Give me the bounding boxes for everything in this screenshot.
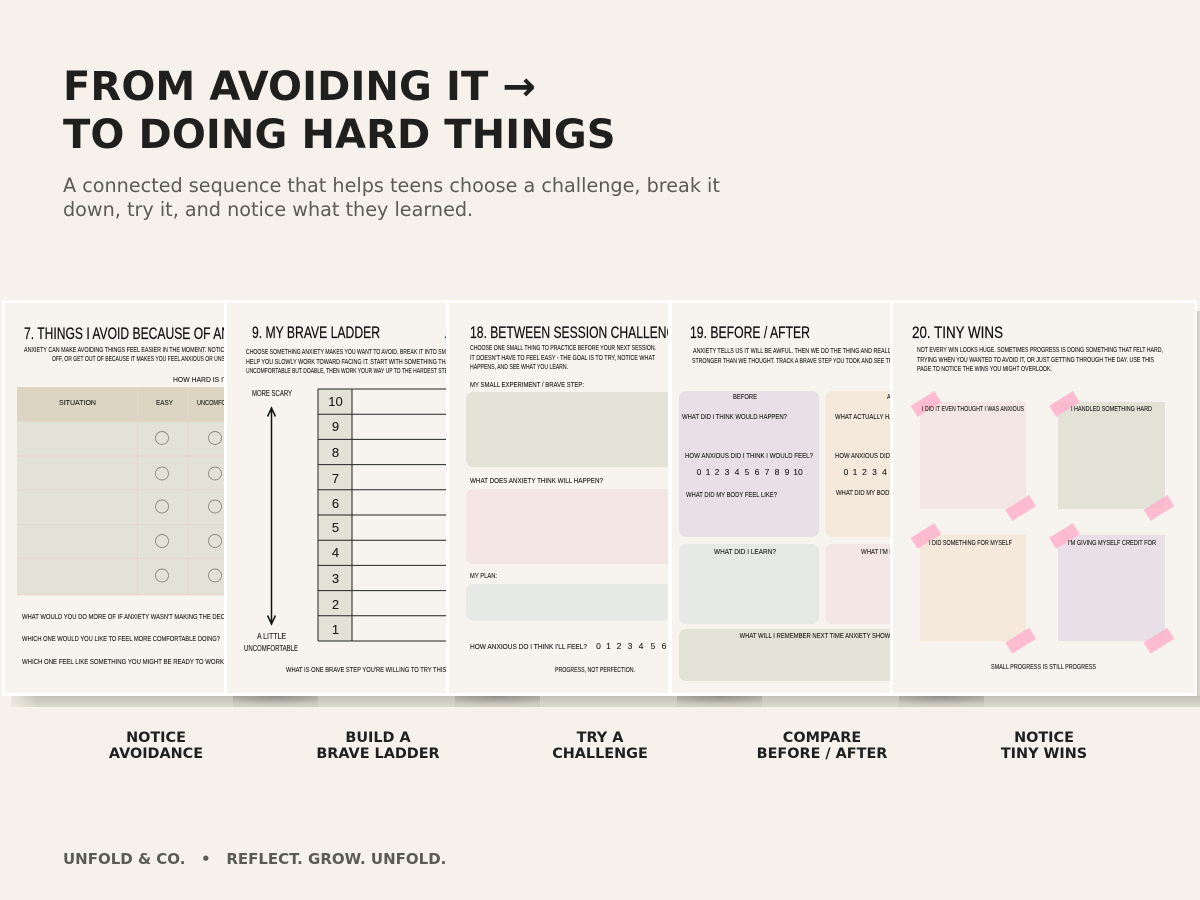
after panel: 1 [853,467,858,477]
heading: 9. MY BRAVE LADDER [252,323,380,342]
before panel: 7 [765,467,770,477]
before panel: WHAT DID MY BODY FEEL LIKE? [686,490,777,499]
sticky note: credit [1049,523,1174,654]
panel: worksheet 9 brave ladder [227,300,449,696]
heading: 20. TINY WINS [912,323,1003,342]
after panel: 4 [882,467,887,477]
learn panel: WHAT DID I LEARN? [714,547,776,556]
before panel: 0 [697,467,702,477]
anxiety rating scale: 2 [617,641,622,651]
intro text [470,343,656,371]
before panel: 6 [755,467,760,477]
title [63,64,616,158]
ladder grid: 3 [332,571,339,586]
caption: try a challenge [552,730,648,762]
panel: worksheet 19 before after [671,300,893,696]
before panel: 1 [706,467,711,477]
intro text: PAGE TO NOTICE THE WINS YOU MIGHT OVERLOOK. [917,364,1052,373]
subtitle [63,174,720,221]
anxiety rating scale: 6 [662,641,667,651]
sticky note: something hard [1049,391,1174,521]
caption: compare before after [757,730,887,762]
anxiety rating scale: 4 [639,641,644,651]
footer brand line: UNFOLD & CO. • REFLECT. GROW. UNFOLD. [63,850,446,868]
ladder grid: 2 [332,597,339,612]
before panel: 10 [793,467,803,477]
ladder grid: 10 [328,394,343,409]
label: a little uncomfortable: UNCOMFORTABLE [244,644,298,653]
ladder grid: 5 [332,520,339,535]
ladder grid [318,389,446,641]
after panel: 2 [862,467,867,477]
caption: notice tiny wins: NOTICE [1014,730,1074,746]
anxiety rating scale: 0 [596,641,601,651]
proud panel [826,544,966,624]
caption: build a brave ladder [316,730,440,762]
before panel [679,391,819,537]
before panel: 9 [785,467,790,477]
before panel: BEFORE [733,392,757,401]
arrow: scale up and down [268,408,275,624]
ladder grid: 6 [332,496,339,511]
caption: notice avoidance: AVOIDANCE [109,746,203,762]
remember panel [679,629,966,681]
panel: worksheet 20 tiny wins [893,300,1197,696]
prompt: my plan [466,571,686,620]
before panel: WHAT DID I THINK WOULD HAPPEN? [682,412,787,421]
avoidance table: EASY [156,398,173,407]
prompt: brave step: MY SMALL EXPERIMENT / BRAVE STEP: [470,380,584,389]
after panel [826,391,966,537]
anxiety rating scale: HOW ANXIOUS DO I THINK I'LL FEEL? [470,642,587,651]
before panel: 5 [745,467,750,477]
title: TO DOING HARD THINGS [63,112,616,158]
reflection questions [22,612,248,666]
anxiety rating scale [470,641,667,651]
label: a little uncomfortable: A LITTLE [257,632,286,641]
title: FROM AVOIDING IT → [63,64,536,110]
caption: notice tiny wins [1000,730,1087,762]
avoidance table: SITUATION [59,398,96,407]
sticky note: for myself [911,523,1036,654]
anxiety rating scale: 3 [628,641,633,651]
subtitle: down, try it, and notice what they learned. [63,198,473,221]
ladder grid: 1 [332,622,339,637]
ladder grid: 8 [332,445,339,460]
caption: compare before after: COMPARE [783,730,861,746]
prompt: anxiety prediction: WHAT DOES ANXIETY THINK WILL HAPPEN? [470,476,603,485]
after panel: 3 [872,467,877,477]
intro text [917,345,1163,373]
caption: build a brave ladder: BUILD A [345,730,411,746]
prompt: my plan: MY PLAN: [470,571,497,580]
anxiety rating scale: 1 [606,641,611,651]
caption: notice avoidance: NOTICE [126,730,186,746]
sticky note: credit: I'M GIVING MYSELF CREDIT FOR [1068,538,1156,547]
label: a little uncomfortable [244,632,298,653]
caption: notice avoidance [109,730,203,762]
after panel: 0 [844,467,849,477]
intro text [692,346,896,365]
footer note: SMALL PROGRESS IS STILL PROGRESS [991,662,1096,671]
prompt: brave step [466,380,686,467]
caption: notice tiny wins: TINY WINS [1001,746,1087,762]
before panel: 2 [715,467,720,477]
anxiety rating scale: 5 [651,641,656,651]
intro text [24,345,270,363]
ladder grid: 7 [332,471,339,486]
before panel: 3 [725,467,730,477]
prompt: anxiety prediction [466,476,686,564]
before panel: 8 [775,467,780,477]
before panel: HOW ANXIOUS DID I THINK I WOULD FEEL? [685,451,813,460]
sticky note: something hard: I HANDLED SOMETHING HARD [1071,404,1152,413]
footer note: PROGRESS, NOT PERFECTION. [555,665,635,674]
subtitle: A connected sequence that helps teens choose a challenge, break it [63,174,720,197]
ladder grid: 9 [332,419,339,434]
caption: try a challenge: CHALLENGE [552,746,648,762]
caption: compare before after: BEFORE / AFTER [757,746,887,762]
sticky note: anxious [911,391,1036,521]
ladder grid: 4 [332,545,339,560]
sticky note: anxious: I DID IT EVEN THOUGHT I WAS ANXIOUS [922,404,1024,413]
caption: try a challenge: TRY A [577,730,623,746]
intro text: HAPPENS, AND SEE WHAT YOU LEARN. [470,362,568,371]
before panel: 4 [735,467,740,477]
heading: 19. BEFORE / AFTER [690,323,810,342]
caption: build a brave ladder: BRAVE LADDER [316,746,440,762]
avoidance table [17,387,247,595]
panel: worksheet 18 between session challenge [449,300,671,696]
intro text [246,347,455,375]
label: more scary: MORE SCARY [252,389,292,398]
panel: worksheet 7 things I avoid [2,300,227,696]
sticky note: for myself: I DID SOMETHING FOR MYSELF [929,538,1012,547]
shadow under worksheet cards [11,311,1200,707]
learn panel [679,544,819,624]
